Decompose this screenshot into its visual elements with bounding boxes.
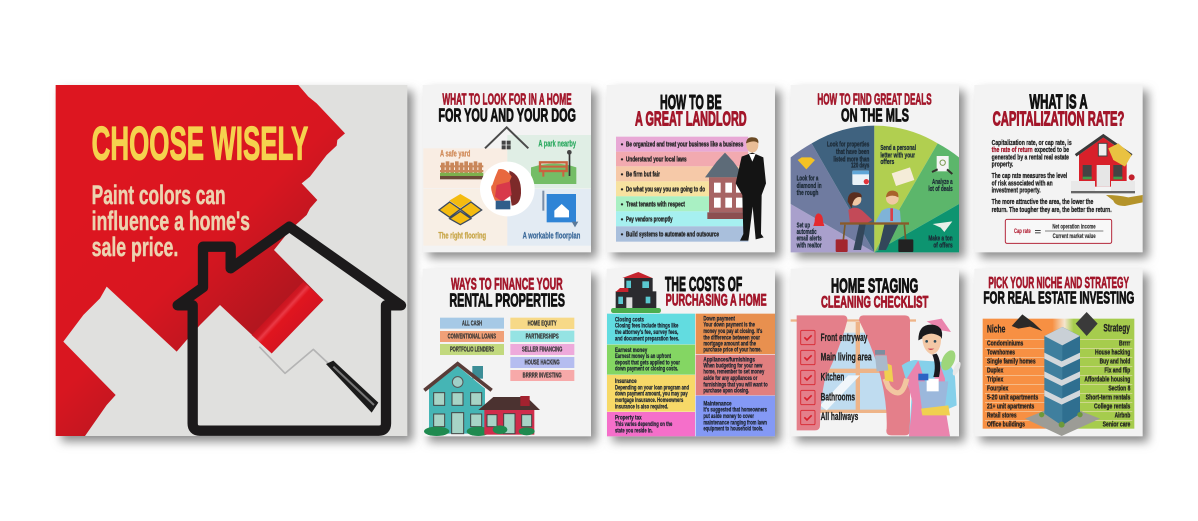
icon: floorplan [543, 191, 578, 227]
heading: A GREAT LANDLORD [635, 109, 747, 131]
cost text: mortgage amount and the [703, 340, 756, 347]
chips: SELLER FINANCING [522, 345, 562, 354]
strategy column: Buy and hold [1100, 356, 1131, 365]
icon: paint roller [252, 282, 378, 413]
icon: building [705, 153, 745, 219]
heading [993, 91, 1124, 131]
panel: capitalization rate [974, 85, 1148, 258]
heading: WAYS TO FINANCE YOUR [451, 274, 563, 293]
heading: THE COSTS OF [665, 274, 742, 296]
heading: choose wisely: CHOOSE WISELY [92, 117, 308, 170]
icon: magnifier document [932, 156, 952, 174]
cost text: Appliances/furnishings [703, 356, 755, 363]
quadrants [423, 135, 591, 246]
cost text: equipment to household tools. [703, 426, 763, 433]
people at table [836, 191, 913, 252]
niche column: Office buildings [987, 420, 1025, 429]
cost text: Down payment [703, 315, 736, 322]
fan labels: letter with your [880, 150, 915, 159]
checklist: All hallways [821, 411, 858, 423]
strategy column [1084, 322, 1131, 429]
list: Pay vendors promptly [626, 215, 673, 224]
checklist: Front entryway [821, 332, 867, 344]
fan labels: that have been [836, 147, 870, 156]
heading: RENTAL PROPERTIES [449, 289, 565, 310]
cost text: down payment or closing costs. [615, 366, 678, 373]
icon: bell [813, 213, 824, 226]
icon: house outline [178, 227, 401, 431]
niche column: 21+ unit apartments [987, 402, 1034, 411]
checklist: Kitchen [821, 372, 844, 384]
chips: HOUSE HACKING [525, 358, 560, 367]
body text: generated by a rental real estate [992, 152, 1069, 161]
list: Build systems to automate and outsource [626, 230, 719, 239]
cost text: purchase upon closing. [703, 388, 749, 395]
fan labels: with realtor [796, 241, 822, 250]
icon: mountain [1012, 314, 1042, 331]
strategy column: Fix and flip [1104, 365, 1131, 374]
fan labels: automatic [797, 227, 817, 236]
heading: HOW TO BE [660, 92, 722, 114]
formula box: Net operation income [1052, 224, 1096, 231]
icon: envelope [892, 167, 914, 186]
cost text: This varies depending on the [615, 421, 673, 428]
color blocks [607, 314, 775, 436]
panel: niche and strategy [974, 269, 1148, 442]
chips: ALL CASH [462, 319, 482, 328]
body text: property. [992, 160, 1013, 169]
panel: choose wisely [56, 85, 413, 442]
list: Be organized and treat your business like a business [626, 140, 743, 149]
panel: costs of purchasing [607, 269, 781, 442]
red paint stroke [56, 85, 345, 436]
body text: of risk associated with an [992, 178, 1053, 187]
chips: CONVENTIONAL LOANS [448, 332, 496, 341]
icon: diamond [798, 157, 815, 169]
cost text: Insurance [615, 378, 637, 385]
body text: The more attractive the area, the lower the [992, 197, 1093, 206]
cost text: Closing fees include things like [615, 323, 679, 330]
heading [665, 274, 767, 309]
icon: teal house [424, 364, 492, 436]
strategy column: Affordable housing [1084, 374, 1131, 383]
cost text: deposit that gets applied to your [615, 359, 680, 366]
fan labels: Analyze a [932, 177, 953, 186]
cost text: money you pay at closing. It's [703, 328, 763, 335]
niche column: Triplex [987, 374, 1004, 383]
niche column: Fourplex [987, 383, 1009, 392]
cost text: state you reside in. [615, 427, 653, 434]
curtains [797, 315, 910, 435]
strategy column: House hacking [1095, 347, 1131, 356]
cost text: aside for any appliances or [703, 375, 758, 382]
body text: investment property. [992, 186, 1041, 195]
icon: red house with tag [1071, 136, 1135, 193]
heading: PURCHASING A HOME [666, 290, 767, 309]
list [621, 140, 743, 239]
cost text: the difference between your [703, 334, 760, 341]
fan labels: Look for a [797, 174, 819, 183]
list: Treat tenants with respect [626, 200, 685, 209]
fan labels: Make a ton [928, 234, 953, 243]
cost text: and document preparation fees. [615, 335, 679, 342]
cost text: put aside money to cover [703, 413, 754, 420]
chips: PARTNERSHIPS [526, 332, 559, 341]
icon: paper plane [933, 221, 952, 232]
strategy column: Airbnb [1115, 410, 1131, 419]
icon: landlord man [736, 137, 766, 241]
fan chart [791, 126, 959, 252]
text: paint colors: sale price. [92, 232, 178, 262]
chips: BRRRR INVESTING [523, 371, 562, 380]
fan labels: listed more than [833, 154, 870, 163]
text: paint colors: Paint colors can [92, 180, 226, 210]
icon: bench in park [531, 150, 576, 184]
strategy column: Brrrr [1119, 338, 1130, 347]
heading [438, 91, 576, 126]
niche column: Townhomes [987, 347, 1015, 356]
fan labels: the rough [797, 188, 819, 197]
icon: house roof [485, 127, 528, 149]
fan labels: Send a personal [880, 143, 916, 152]
panel: what to look for in a home [423, 85, 597, 258]
heading: CLEANING CHECKLIST [821, 293, 928, 312]
strategy column: Short-term rentals [1086, 393, 1130, 402]
body text: Capitalization rate, or cap rate, is [992, 138, 1072, 147]
cost text: maintenance ranging from lawn [703, 419, 767, 426]
fan labels: 120 days [851, 161, 869, 170]
formula box: Current market value [1053, 233, 1096, 240]
formula box: Cap rate [1014, 228, 1031, 235]
body text: expected to be [1034, 145, 1069, 154]
fan labels: lot of deals [928, 184, 953, 193]
fan labels: of offers [933, 241, 953, 250]
cost text: insurance is also required. [615, 403, 668, 410]
icon: fence [440, 161, 483, 179]
checklist: Main living area [821, 352, 872, 364]
labels: The right flooring [438, 230, 486, 240]
list: Do what you say you are going to do [626, 185, 705, 194]
icon: cleaning woman [875, 319, 962, 436]
checklist: Bathrooms [821, 391, 855, 403]
strategy column: Senior care [1103, 420, 1130, 429]
chips: HOME EQUITY [528, 319, 557, 328]
cost text: Property tax [615, 415, 642, 422]
icon: red house [478, 396, 540, 435]
labels: A safe yard [440, 148, 470, 158]
niche column: Condominiums [987, 338, 1023, 347]
list: Understand your local laws [626, 155, 687, 164]
niche column: Single family homes [987, 356, 1036, 365]
heading [817, 91, 932, 126]
icon: woman hugging dog [480, 162, 535, 216]
chips [440, 318, 574, 381]
strategy column: Strategy [1103, 322, 1130, 334]
body text [992, 138, 1112, 214]
heading: WHAT TO LOOK FOR IN A HOME [442, 91, 572, 108]
heading: HOME STAGING [831, 276, 918, 298]
labels [438, 139, 580, 240]
body text: the rate of return [992, 145, 1033, 154]
cost text: It's suggested that homeowners [703, 407, 767, 414]
labels: A workable floorplan [523, 230, 580, 240]
cost text: Depending on your loan program and [615, 384, 689, 391]
cost text: When budgeting for your new [703, 362, 763, 369]
strategy column: College rentals [1094, 402, 1130, 411]
cost text: furnishings that you will want to [703, 381, 768, 388]
niche column: Niche [987, 324, 1005, 336]
panel: ways to finance [423, 269, 597, 442]
cost text: Closing costs [615, 316, 644, 323]
panel: home staging [791, 269, 965, 442]
niche column: Duplex [987, 365, 1004, 374]
fan labels: Look for properties [827, 140, 869, 149]
checklist [801, 330, 872, 425]
cost text: Your down payment is the [703, 322, 755, 329]
window [820, 322, 887, 413]
cost text: Earnest money [615, 347, 648, 354]
curtain rod [791, 319, 916, 322]
panel: great landlord [607, 85, 781, 258]
chips: PORTFOLIO LENDERS [450, 345, 494, 354]
heading [449, 274, 565, 310]
formula box [1005, 219, 1112, 243]
niche column: Retail stores [987, 410, 1017, 419]
list: Be firm but fair [626, 170, 660, 179]
stripes [616, 137, 748, 242]
icon: hand [1106, 195, 1143, 206]
icon: dark house [611, 272, 661, 313]
fan labels [796, 140, 953, 250]
fan labels: offers [880, 157, 894, 166]
cost text: purchase price of your home. [703, 347, 762, 354]
cost text: Maintenance [703, 400, 732, 407]
icon: office tower [1025, 327, 1100, 436]
text: paint colors: influence a home's [92, 206, 250, 236]
fan labels: Set up [797, 220, 810, 229]
icon: chess pieces [1076, 312, 1098, 336]
labels: A park nearby [538, 139, 576, 149]
body text: return. The tougher they are, the better the return. [992, 205, 1112, 214]
fan labels: diamond in [797, 181, 822, 190]
heading [635, 92, 747, 131]
heading [821, 276, 928, 312]
panel: great deals on the mls [791, 85, 965, 258]
heading: HOW TO FIND GREAT DEALS [817, 91, 932, 108]
heading: ON THE MLS [841, 105, 909, 126]
table background [983, 319, 1134, 429]
heading: FOR YOU AND YOUR DOG [438, 105, 576, 126]
cost text: Earnest money is an upfront [615, 353, 671, 360]
strategy column: Section 8 [1108, 383, 1131, 392]
heading [983, 275, 1134, 308]
cost text [615, 315, 768, 434]
niche column [987, 324, 1038, 429]
heading: WHAT IS A [1029, 91, 1088, 113]
fan labels: email alerts [797, 234, 822, 243]
text: paint colors [92, 180, 250, 262]
cost text: home, remember to set money [703, 369, 765, 376]
cost text: mortgage insurance. Homeowners [615, 397, 684, 404]
body text: The cap rate measures the level [992, 171, 1067, 180]
cost text: down payment amount, you may pay [615, 391, 688, 398]
icon: calendar [852, 171, 869, 185]
niche column: 5-20 unit apartments [987, 393, 1038, 402]
icon: flooring [439, 194, 482, 225]
cost text: the attorney's fee, survey fees, [615, 329, 678, 336]
